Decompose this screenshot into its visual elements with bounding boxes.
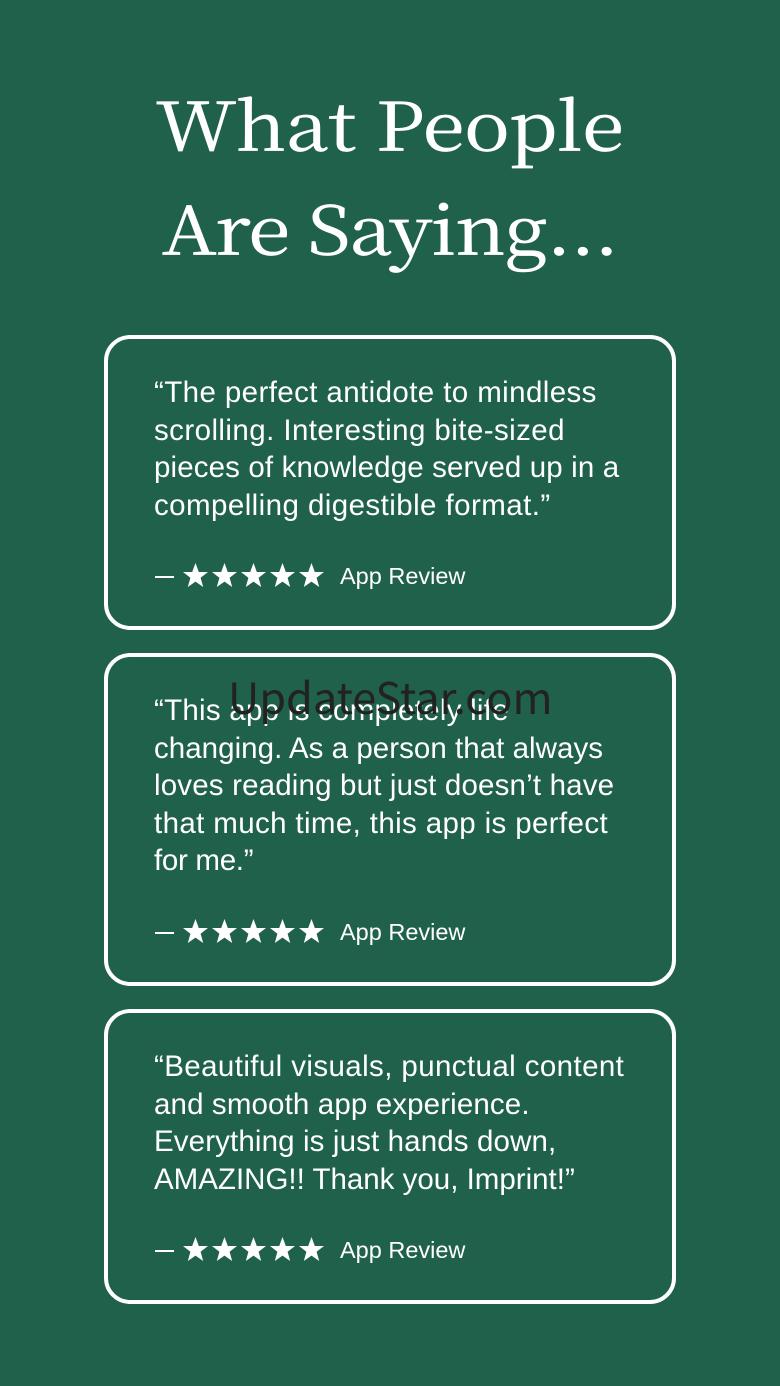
panel: review 3 [104,1009,676,1304]
quote 2: that much time, this app is perfect [154,806,608,840]
title [156,74,624,274]
rating 2: App Review [340,919,465,945]
quote 2: changing. As a person that always [154,732,603,764]
rating 3 [155,1237,466,1263]
quote 3: AMAZING!! Thank you, Imprint!” [154,1162,575,1196]
quote 3: “Beautiful visuals, punctual content [154,1050,624,1083]
quote 1: compelling digestible format.” [154,488,551,522]
quote 2: “This app is completely life [154,694,509,727]
title: Are Saying... [162,178,618,274]
quote 2 [154,694,614,877]
quote 2: for me.” [154,844,253,877]
quote 1: scrolling. Interesting bite-sized [154,414,565,446]
panel: review 1 [104,335,676,630]
quote 3: Everything is just hands down, [154,1125,556,1158]
watermark: UpdateStar.com [228,665,553,727]
panel: review 2 [104,653,676,986]
rating 1 [155,563,466,589]
quote 1 [154,376,620,522]
rating 2 [155,919,466,945]
rating 1: App Review [340,563,465,589]
title: What People [156,74,624,170]
quote 3 [154,1050,624,1196]
quote 3: and smooth app experience. [154,1088,530,1120]
quote 1: “The perfect antidote to mindless [154,376,597,409]
rating 3: App Review [340,1237,465,1263]
quote 1: pieces of knowledge served up in a [154,451,619,484]
quote 2: loves reading but just doesn’t have [154,769,614,802]
